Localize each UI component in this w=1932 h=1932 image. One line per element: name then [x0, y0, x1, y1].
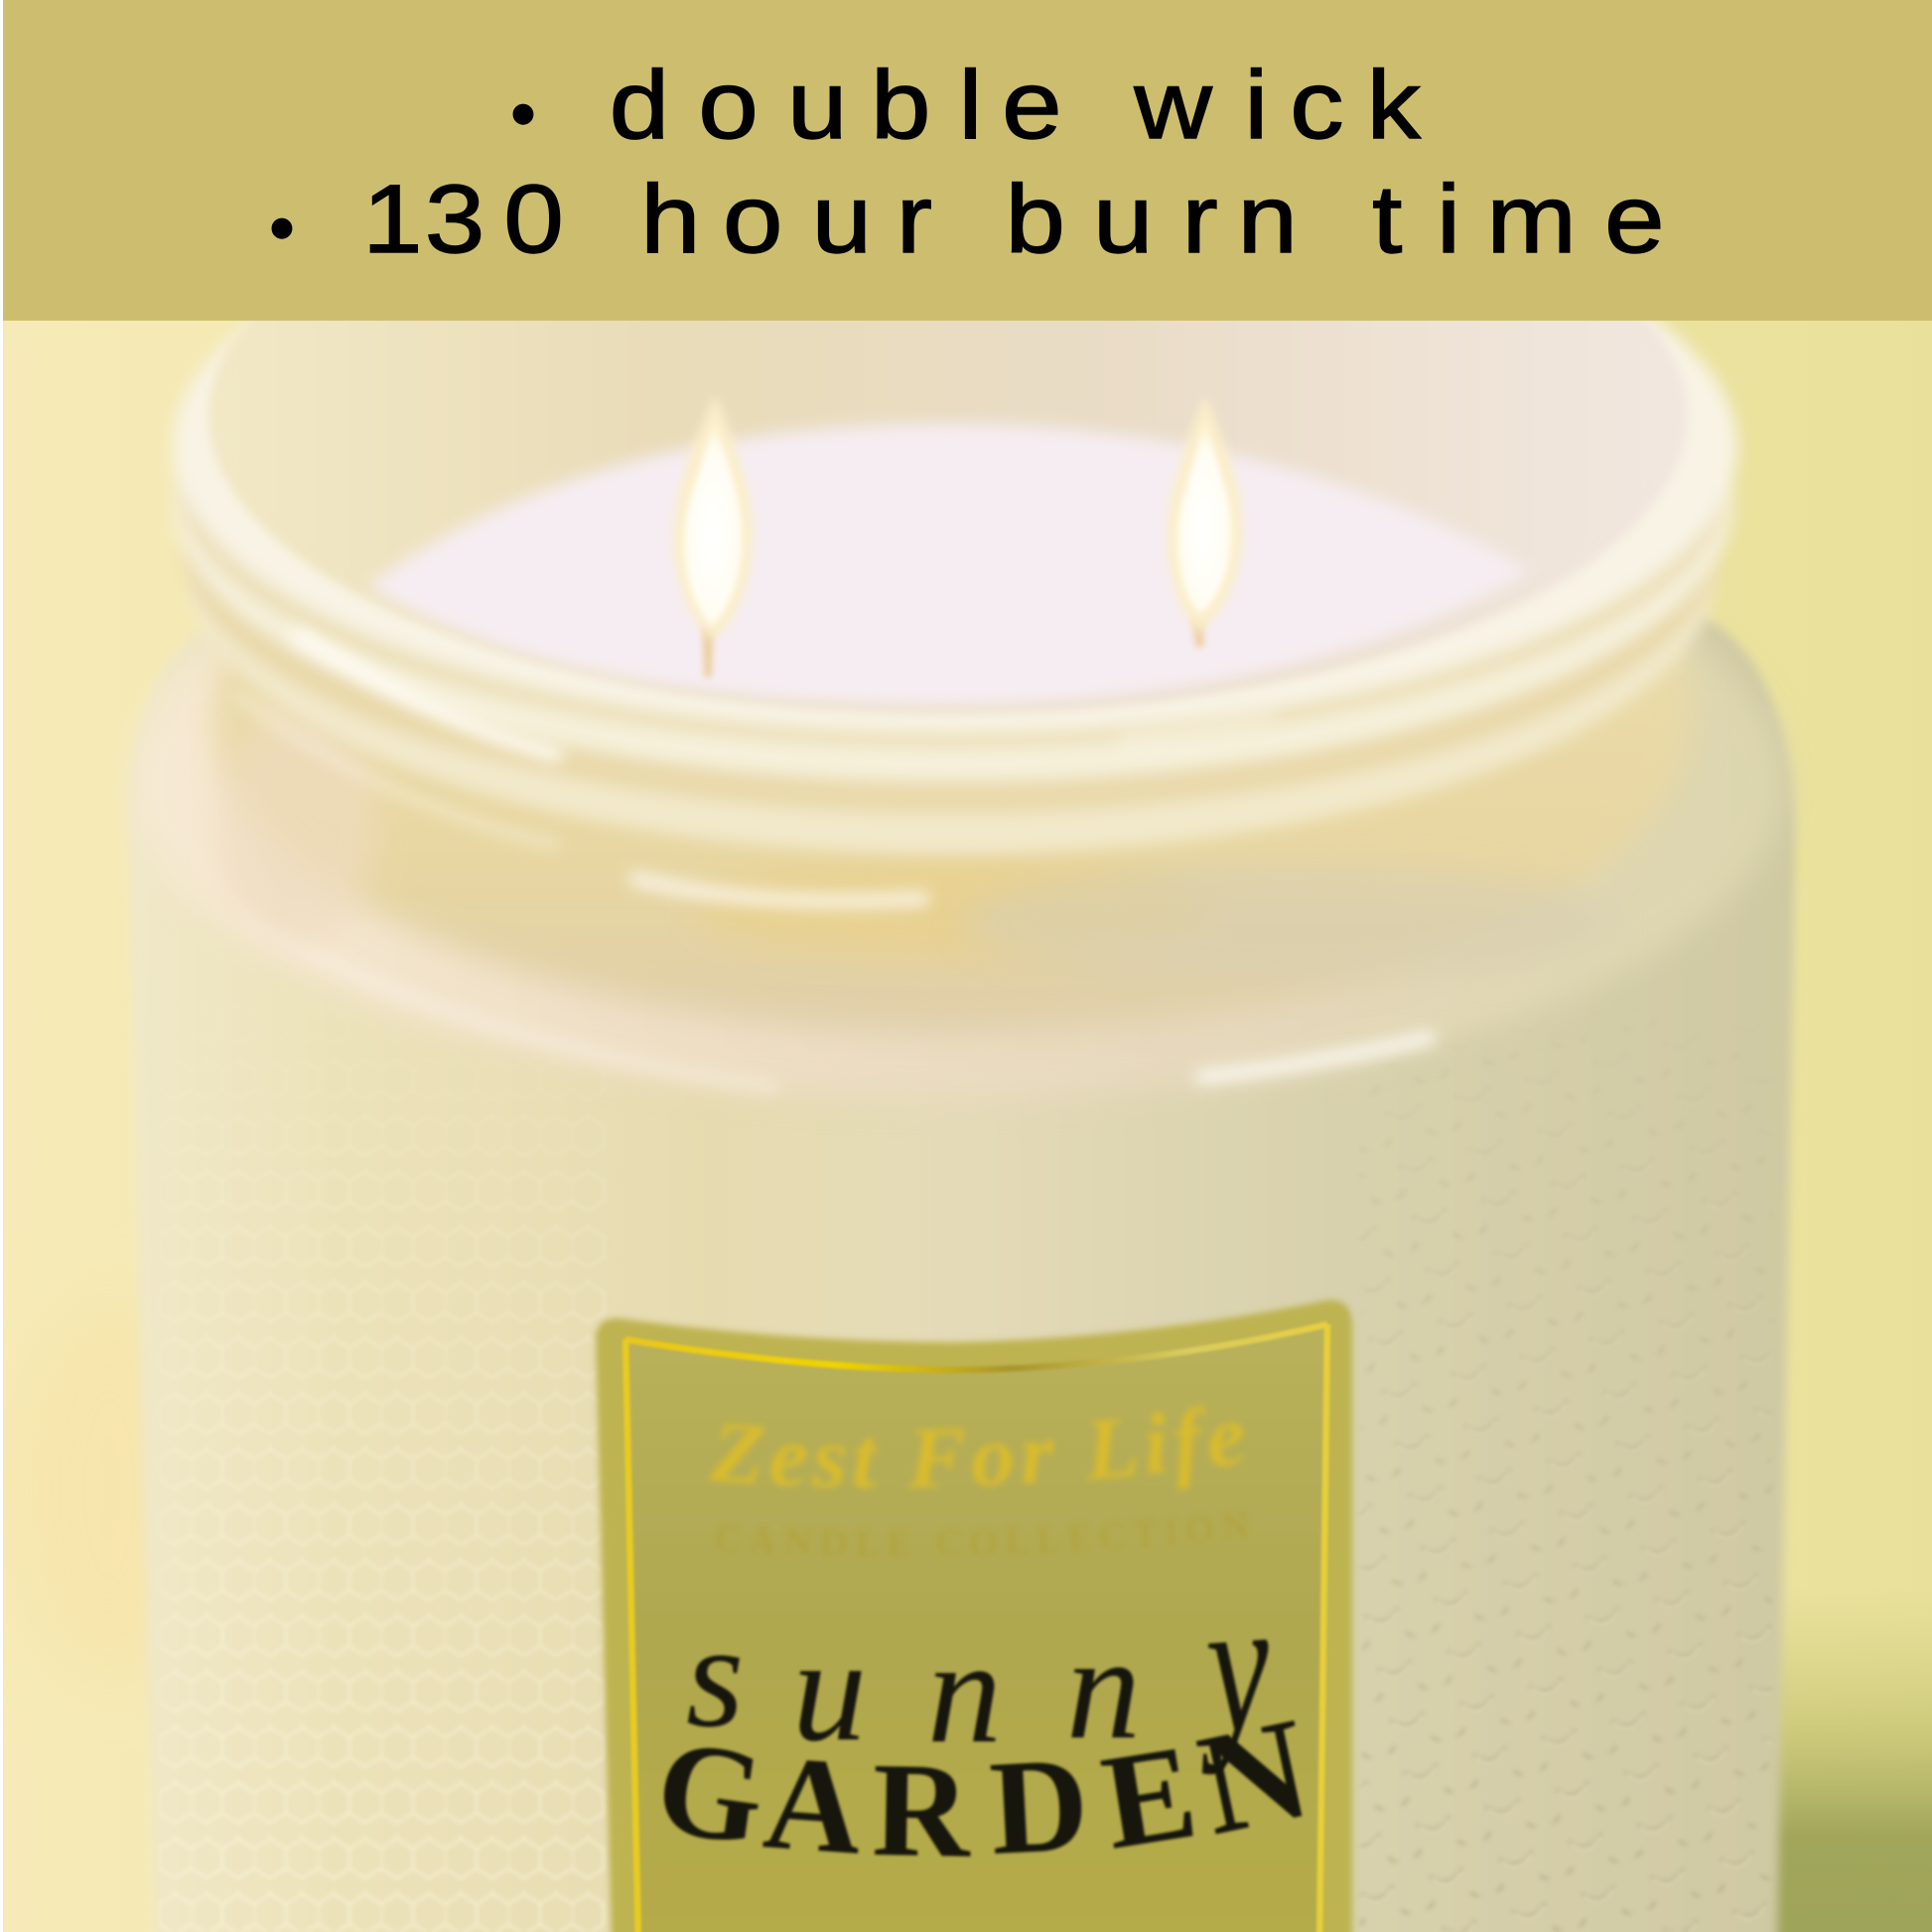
line: double wick: •	[510, 74, 536, 154]
top banner	[3, 0, 1932, 321]
candle jar body	[129, 616, 1795, 1932]
jar texture: embossed pattern	[173, 1253, 1771, 1932]
jar shoulder	[126, 649, 1779, 1096]
line: 130 hour burn time: burn	[1005, 165, 1298, 273]
line: 130 hour burn time: 130	[362, 165, 564, 273]
product name: GARDEN: D	[987, 1729, 1092, 1883]
jar neck	[202, 656, 1686, 1037]
gold border	[625, 1324, 1327, 1932]
line: double wick	[510, 51, 1421, 159]
product name: GARDEN: A	[759, 1727, 867, 1883]
jar inner wall	[206, 321, 1686, 716]
brand subtitle: candle collection: CANDLE COLLECTION	[716, 1514, 1247, 1557]
product name: sunny: u	[792, 1607, 867, 1772]
product name: GARDEN	[648, 1687, 1322, 1886]
product name: sunny	[686, 1556, 1277, 1775]
product name: sunny: n	[1066, 1605, 1141, 1770]
line: double wick: double	[610, 51, 1062, 159]
ridge highlights	[238, 635, 1271, 844]
product name: GARDEN: G	[648, 1712, 772, 1873]
brand name: Zest For Life: Zest For Life	[708, 1404, 1245, 1491]
line: 130 hour burn time: hour	[640, 165, 932, 273]
screw ridges	[167, 321, 1745, 862]
neck highlight	[635, 879, 923, 901]
label plate	[596, 1301, 1352, 1932]
product name: sunny: y	[1186, 1556, 1277, 1775]
product name: GARDEN: N	[1186, 1687, 1322, 1865]
line: 130 hour burn time	[269, 165, 1665, 273]
right wick and flame	[1167, 395, 1243, 647]
product name: sunny: s	[686, 1593, 744, 1758]
line: double wick: wick	[1133, 51, 1421, 159]
line: 130 hour burn time: time	[1372, 165, 1665, 273]
product label	[592, 1297, 1356, 1932]
wax pool	[368, 424, 1531, 707]
product name: GARDEN: E	[1093, 1717, 1205, 1878]
product name: sunny: n	[927, 1609, 1002, 1774]
shoulder highlights	[290, 949, 1442, 1095]
line: 130 hour burn time: •	[269, 189, 295, 268]
product name: GARDEN: R	[871, 1735, 973, 1886]
left wick and flame	[673, 395, 753, 677]
